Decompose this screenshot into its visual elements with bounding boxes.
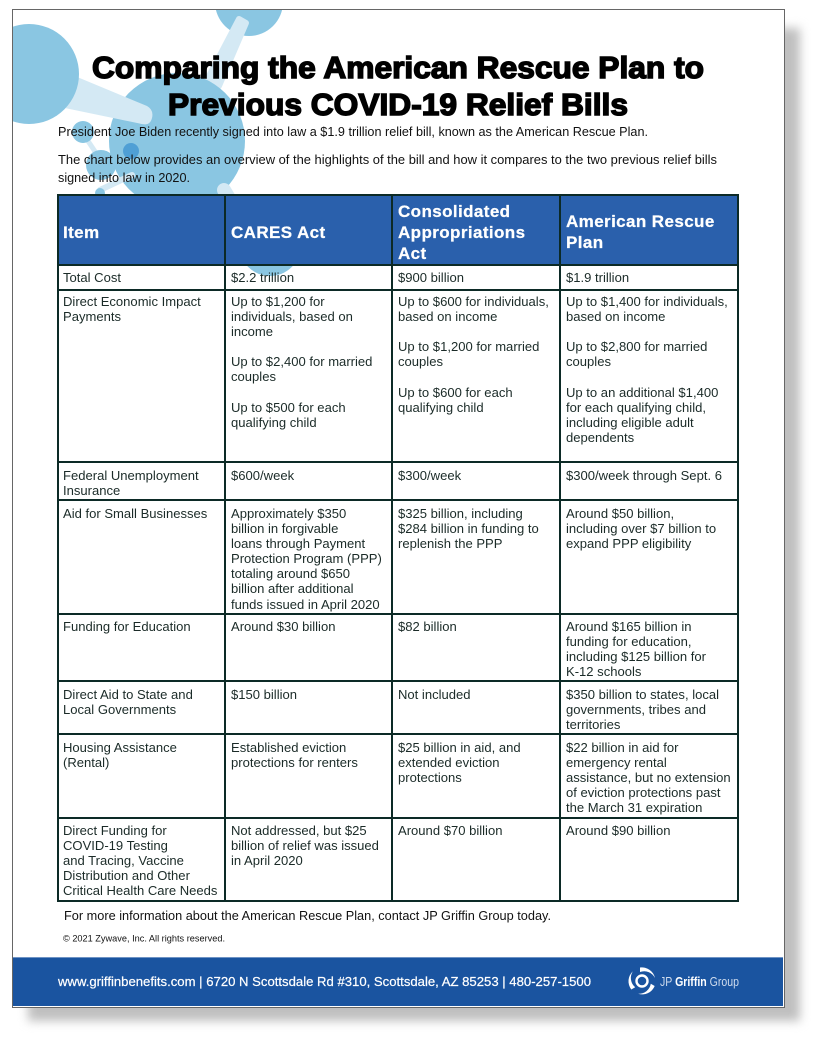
row: direct economic impact payments: Up to $1,200 for: [231, 294, 325, 309]
row: housing assistance: the March 31 expiration: [566, 800, 702, 815]
comparison table: [57, 194, 739, 902]
row: direct economic impact payments: dependents: [566, 430, 634, 445]
row: direct economic impact payments: Up to $600 for individuals,: [398, 294, 549, 309]
row: housing assistance: extended eviction: [398, 755, 500, 770]
row: direct funding for testing and vaccines: COVID-19 Testing: [63, 838, 168, 853]
row: aid for small businesses: Approximately $350: [231, 506, 346, 521]
row: funding for education: Around $30 billion: [231, 619, 335, 634]
row: aid for small businesses: $325 billion, including: [398, 506, 523, 521]
row: direct funding for testing and vaccines: [57, 817, 737, 900]
row: funding for education: including $125 billion for: [566, 649, 706, 664]
row: direct economic impact payments: Payments: [63, 309, 121, 324]
row: housing assistance: protections for renters: [231, 755, 358, 770]
footer band: [13, 957, 783, 1006]
closing note: For more information about the American Rescue Plan, contact JP Griffin Group today.: [64, 909, 551, 923]
row: housing assistance: emergency rental: [566, 755, 667, 770]
JP Griffin Group logo: JP Griffin Group: [660, 975, 739, 989]
row: direct economic impact payments: couples: [566, 354, 611, 369]
table header row: [57, 194, 737, 264]
row: direct economic impact payments: qualifying child: [398, 400, 484, 415]
row: direct economic impact payments: for each qualifying child,: [566, 400, 706, 415]
row: direct economic impact payments: couples: [231, 369, 276, 384]
row: direct economic impact payments: individuals, based on: [231, 309, 353, 324]
row: aid for small businesses: Around $50 billion,: [566, 506, 674, 521]
row: federal unemployment insurance: Federal Unemployment: [63, 468, 199, 483]
row: direct funding for testing and vaccines: billion of relief was issued: [231, 838, 379, 853]
intro text: [58, 125, 717, 185]
row: total cost: [57, 264, 737, 289]
row: housing assistance: $25 billion in aid, and: [398, 740, 521, 755]
row: direct economic impact payments: including eligible adult: [566, 415, 694, 430]
row: direct aid to state and local governments: Local Governments: [63, 702, 176, 717]
row: housing assistance: $22 billion in aid for: [566, 740, 678, 755]
row: direct funding for testing and vaccines: Direct Funding for: [63, 823, 167, 838]
row: funding for education: $82 billion: [398, 619, 457, 634]
row: direct aid to state and local governments: Not included: [398, 687, 471, 702]
row: aid for small businesses: expand PPP eligibility: [566, 536, 691, 551]
table header row: Plan: [566, 233, 604, 252]
row: aid for small businesses: replenish the PPP: [398, 536, 502, 551]
row: funding for education: funding for education,: [566, 634, 692, 649]
row: direct funding for testing and vaccines: Distribution and Other: [63, 868, 190, 883]
row: total cost: $2.2 trillion: [231, 270, 294, 285]
row: total cost: Total Cost: [63, 270, 121, 285]
row: direct economic impact payments: Up to $1,200 for married: [398, 339, 539, 354]
table header row: Consolidated: [398, 202, 510, 220]
title: Previous COVID-19 Relief Bills: [168, 87, 628, 122]
row: aid for small businesses: billion in forgivable: [231, 521, 338, 536]
row: direct economic impact payments: based on income: [566, 309, 665, 324]
row: aid for small businesses: funds issued in April 2020: [231, 597, 380, 612]
row: direct economic impact payments: Up to an additional $1,400: [566, 385, 718, 400]
row: direct economic impact payments: Up to $2,800 for married: [566, 339, 707, 354]
row: federal unemployment insurance: $300/week through Sept. 6: [566, 468, 722, 483]
table header row: American Rescue: [566, 212, 715, 231]
table header row: Item: [63, 222, 100, 242]
row: direct funding for testing and vaccines: and Tracing, Vaccine: [63, 853, 184, 868]
background molecule illustration: [13, 10, 293, 276]
row: housing assistance: assistance, but no extension: [566, 770, 731, 785]
intro text: The chart below provides an overview of the highlights of the bill and how it compares to the two previous relief bills: [58, 153, 717, 167]
row: aid for small businesses: Protection Program (PPP): [231, 551, 382, 566]
row: federal unemployment insurance: $600/week: [231, 468, 294, 483]
row: direct aid to state and local governments: $150 billion: [231, 687, 297, 702]
row: funding for education: K-12 schools: [566, 664, 641, 679]
row: aid for small businesses: billion after additional: [231, 581, 354, 596]
row: housing assistance: (Rental): [63, 755, 109, 770]
row: direct aid to state and local governments: territories: [566, 717, 620, 732]
row: direct economic impact payments: [57, 289, 737, 461]
row: total cost: $1.9 trillion: [566, 270, 629, 285]
intro text: President Joe Biden recently signed into law a $1.9 trillion relief bill, known as the American Rescue Plan.: [58, 125, 648, 139]
row: direct funding for testing and vaccines: Not addressed, but $25: [231, 823, 367, 838]
row: direct funding for testing and vaccines: in April 2020: [231, 853, 303, 868]
row: direct economic impact payments: income: [231, 324, 273, 339]
row: direct economic impact payments: qualifying child: [231, 415, 317, 430]
row: aid for small businesses: Aid for Small Businesses: [63, 506, 207, 521]
intro text: signed into law in 2020.: [58, 171, 190, 185]
row: total cost: $900 billion: [398, 270, 464, 285]
row: aid for small businesses: including over $7 billion to: [566, 521, 716, 536]
title: [92, 50, 704, 122]
row: aid for small businesses: [57, 499, 737, 613]
row: funding for education: [57, 613, 737, 680]
row: federal unemployment insurance: Insurance: [63, 483, 120, 498]
row: direct aid to state and local governments: [57, 680, 737, 733]
row: funding for education: Around $165 billion in: [566, 619, 692, 634]
row: direct economic impact payments: Up to $500 for each: [231, 400, 346, 415]
table header row: Act: [398, 244, 427, 262]
row: direct aid to state and local governments: governments, tribes and: [566, 702, 706, 717]
row: housing assistance: of eviction protections past: [566, 785, 720, 800]
row: direct economic impact payments: couples: [398, 354, 443, 369]
row: aid for small businesses: $284 billion in funding to: [398, 521, 539, 536]
title: Comparing the American Rescue Plan to: [92, 50, 704, 85]
row: housing assistance: Established eviction: [231, 740, 346, 755]
table header row: CARES Act: [231, 222, 326, 242]
row: aid for small businesses: totaling around $650: [231, 566, 350, 581]
row: direct funding for testing and vaccines: Around $90 billion: [566, 823, 670, 838]
row: federal unemployment insurance: $300/week: [398, 468, 461, 483]
contact line: www.griffinbenefits.com | 6720 N Scottsdale Rd #310, Scottsdale, AZ 85253 | 480-257-1500: [57, 975, 591, 989]
row: housing assistance: [57, 733, 737, 817]
row: direct funding for testing and vaccines: Critical Health Care Needs: [63, 883, 217, 898]
row: direct funding for testing and vaccines: Around $70 billion: [398, 823, 502, 838]
row: direct economic impact payments: Direct Economic Impact: [63, 294, 201, 309]
copyright: © 2021 Zywave, Inc. All rights reserved.: [63, 934, 225, 944]
row: direct economic impact payments: Up to $1,400 for individuals,: [566, 294, 728, 309]
row: federal unemployment insurance: [57, 461, 737, 499]
row: direct aid to state and local governments: $350 billion to states, local: [566, 687, 719, 702]
row: housing assistance: protections: [398, 770, 462, 785]
row: housing assistance: Housing Assistance: [63, 740, 177, 755]
row: aid for small businesses: loans through Payment: [231, 536, 365, 551]
row: direct economic impact payments: based on income: [398, 309, 497, 324]
row: funding for education: Funding for Education: [63, 619, 191, 634]
row: direct economic impact payments: Up to $600 for each: [398, 385, 513, 400]
row: direct economic impact payments: Up to $2,400 for married: [231, 354, 372, 369]
table header row: Appropriations: [398, 222, 525, 242]
row: direct aid to state and local governments: Direct Aid to State and: [63, 687, 193, 702]
JP Griffin Group logo: [628, 967, 739, 994]
